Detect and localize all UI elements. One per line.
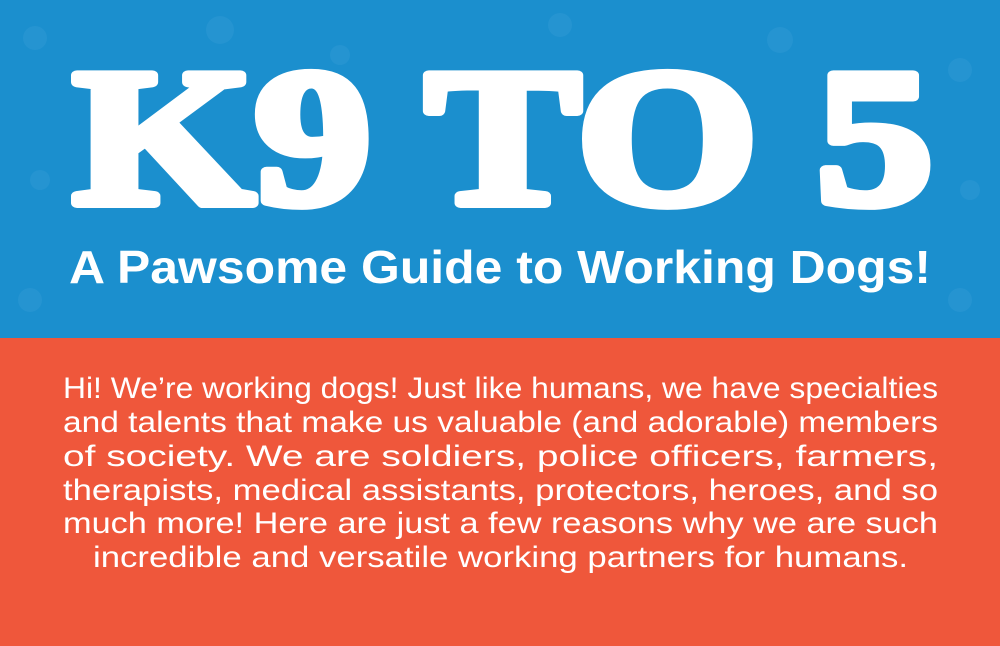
title: K9 TO 5 — [73, 30, 933, 246]
text block: intro — [63, 372, 938, 574]
text block: intro: of society. We are soldiers, police officers, farmers, — [63, 440, 938, 473]
text block: intro: therapists, medical assistants, protectors, heroes, and so — [63, 474, 938, 507]
text block: intro: incredible and versatile working partners for humans. — [93, 541, 908, 574]
text block: intro: Hi! We’re working dogs! Just like humans, we have specialties — [63, 372, 938, 405]
subtitle: A Pawsome Guide to Working Dogs! — [69, 241, 931, 293]
text block: intro: much more! Here are just a few reasons why we are such — [63, 507, 938, 540]
panel: blue header — [0, 0, 1000, 338]
text block: intro: and talents that make us valuable (and adorable) members — [63, 406, 938, 439]
panel: orange intro — [0, 338, 1000, 646]
